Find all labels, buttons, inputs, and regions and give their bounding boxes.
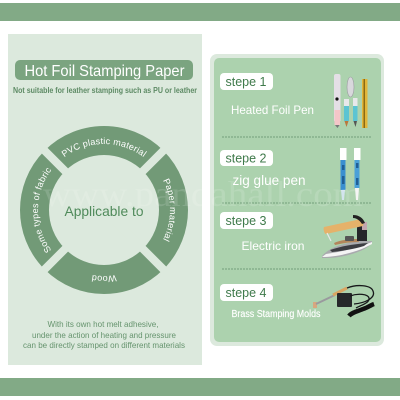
step 2 label: stepe 2: [226, 150, 266, 166]
bottom banner: [0, 378, 400, 396]
top banner: [0, 3, 400, 21]
segment label: wood: Wood: [92, 275, 117, 282]
segment label: PVC plastic material: PVC plastic material: [61, 138, 147, 157]
icon: electric iron: [322, 215, 372, 258]
description text: [23, 319, 185, 350]
panel: steps: [210, 54, 384, 346]
title: Hot Foil Stamping Paper: [24, 63, 185, 80]
step 2 name: zig glue pen: [232, 173, 306, 188]
step 4 label: stepe 4: [226, 285, 266, 300]
step 1 label: stepe 1: [226, 74, 266, 89]
description text: can be directly stamped on different materials: [23, 340, 185, 350]
icon: zig glue pens: [340, 148, 360, 200]
panel: hot foil stamping paper: [8, 34, 202, 365]
segment label: some types of fabric: Some types of fabric: [33, 168, 51, 253]
step 3 name: Electric iron: [242, 239, 304, 253]
icon: heated foil pen kit: [334, 74, 368, 128]
step 4 name: Brass Stamping Molds: [232, 309, 320, 320]
step 1 name: Heated Foil Pen: [231, 103, 314, 117]
ring chart: applicable materials: [20, 126, 188, 294]
segment label: paper material: Paper material: [163, 178, 175, 242]
ring segments: [34, 140, 174, 280]
description text: With its own hot melt adhesive,: [48, 319, 158, 329]
ring centre label: Applicable to: [64, 203, 144, 219]
watermark: www.pandahall.com: [43, 174, 363, 214]
step 3 label: stepe 3: [226, 213, 266, 228]
description text: under the action of heating and pressure: [32, 330, 176, 340]
subtitle warning: Not suitable for leather stamping such as PU or leather: [13, 86, 197, 95]
icon: stamping tool: [313, 286, 374, 316]
